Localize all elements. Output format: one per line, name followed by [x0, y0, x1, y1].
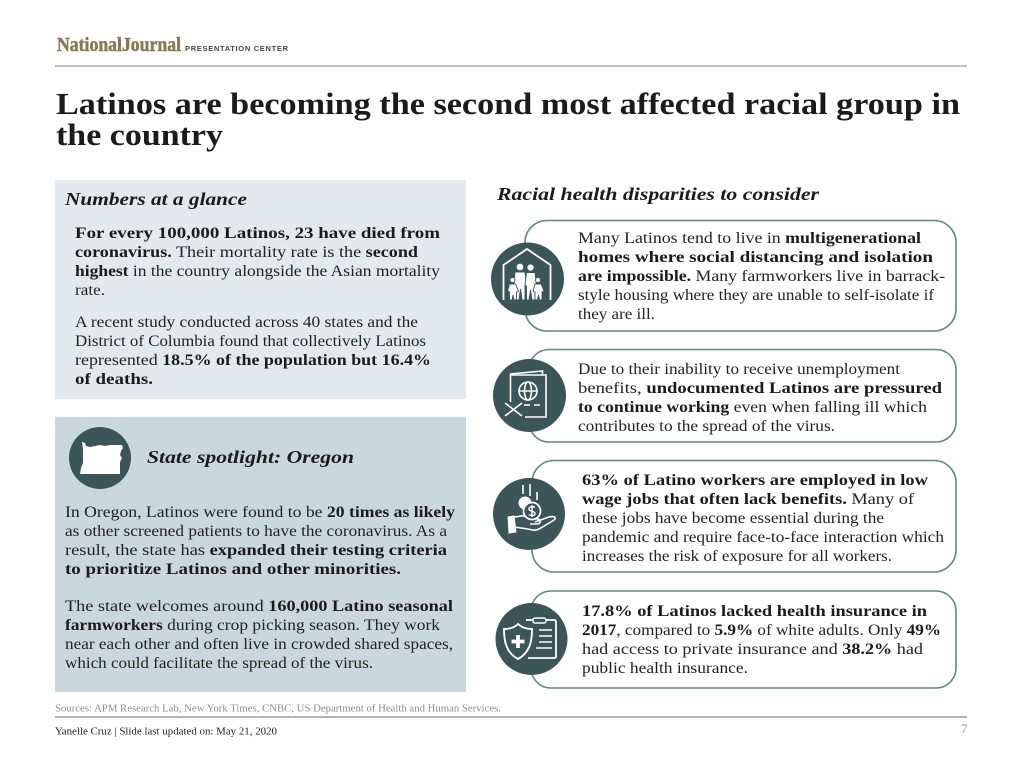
card: low wage jobs — [493, 460, 956, 572]
text block: 40 state study — [75, 314, 431, 388]
text: low wage — [582, 472, 944, 565]
text: housing: style housing where they are unable to self-isolate if — [578, 287, 935, 304]
text block: mortality rate: coronavirus. Their mortality rate is the second — [75, 244, 418, 261]
sources: Sources: APM Research Lab, New York Times, CNBC, US Department of Health and Human Services. — [55, 704, 501, 714]
text: low wage: wage jobs that often lack benefits. Many of — [582, 491, 915, 508]
icon: family in house — [491, 242, 564, 316]
text block: seasonal farmworkers — [65, 598, 454, 672]
panel: numbers at a glance — [55, 180, 466, 399]
text: low wage: increases the risk of exposure for all workers. — [582, 548, 892, 565]
text block: 40 state study: A recent study conducted across 40 states and the — [75, 314, 418, 331]
text: unemployment — [578, 361, 942, 435]
text: insurance: public health insurance. — [582, 660, 748, 677]
text block: testing criteria: result, the state has expanded their testing criteria — [65, 542, 447, 559]
text block: seasonal farmworkers: which could facilitate the spread of the virus. — [65, 655, 373, 672]
text block: testing criteria: to prioritize Latinos and other minorities. — [65, 561, 401, 578]
text block: 40 state study: District of Columbia found that collectively Latinos — [75, 333, 426, 350]
text: housing: they are ill. — [578, 306, 655, 323]
text block: testing criteria: In Oregon, Latinos were found to be 20 times as likely — [65, 504, 455, 521]
logo: National Journal Presentation Center: NationalJournal — [57, 34, 181, 56]
text: housing: homes where social distancing and isolation — [578, 249, 933, 266]
text block: testing criteria — [65, 504, 455, 578]
icon: passport — [493, 359, 566, 432]
title: Latinos are becoming the second most affected racial group in — [56, 87, 960, 121]
icon: Oregon map — [69, 427, 131, 489]
heading: racial health disparities: Racial health disparities to consider — [496, 184, 820, 204]
text: insurance: had access to private insurance and 38.2% had — [582, 641, 923, 658]
logo: National Journal Presentation Center: PRESENTATION CENTER — [185, 44, 289, 53]
footer credit: Yanelle Cruz | Slide last updated on: May 21, 2020 — [55, 726, 277, 738]
text: unemployment: Due to their inability to receive unemployment — [578, 361, 901, 378]
card: undocumented Latinos — [493, 350, 956, 442]
text block: mortality rate — [75, 225, 441, 299]
title — [56, 87, 960, 152]
text: housing: are impossible. Many farmworkers live in barrack- — [578, 268, 945, 285]
title: the country — [56, 118, 223, 152]
panel: state spotlight Oregon — [55, 417, 466, 692]
icon: shield and clipboard — [496, 603, 568, 675]
heading: numbers at a glance: Numbers at a glance — [64, 189, 247, 209]
page number: 7 — [961, 721, 968, 736]
text block: seasonal farmworkers: The state welcomes around 160,000 Latino seasonal — [65, 598, 454, 615]
text: unemployment: benefits, undocumented Latinos are pressured — [578, 380, 942, 397]
logo: National Journal Presentation Center — [57, 34, 289, 56]
text block: mortality rate: rate. — [75, 282, 105, 299]
icon: coin over hand — [493, 478, 565, 550]
text: unemployment: contributes to the spread of the virus. — [578, 418, 835, 435]
text: insurance: 2017, compared to 5.9% of white adults. Only 49% — [582, 622, 941, 639]
text: unemployment: to continue working even when falling ill which — [578, 399, 927, 416]
text block: seasonal farmworkers: near each other and often live in crowded shared spaces, — [65, 636, 453, 653]
text: insurance — [582, 603, 941, 677]
text: low wage: 63% of Latino workers are employed in low — [582, 472, 929, 489]
text block: mortality rate: For every 100,000 Latinos, 23 have died from — [75, 225, 441, 242]
text: insurance: 17.8% of Latinos lacked health insurance in — [582, 603, 927, 620]
text: low wage: these jobs have become essential during the — [582, 510, 884, 527]
text: housing: Many Latinos tend to live in multigenerational — [578, 230, 922, 247]
text block: seasonal farmworkers: farmworkers during crop picking season. They work — [65, 617, 440, 634]
text block: testing criteria: as other screened patients to have the coronavirus. As a — [65, 523, 447, 540]
card: health insurance — [496, 591, 956, 688]
text: low wage: pandemic and require face-to-face interaction which — [582, 529, 944, 546]
text block: mortality rate: highest in the country alongside the Asian mortality — [75, 263, 440, 280]
card: multigenerational homes — [491, 220, 956, 331]
heading: state spotlight: State spotlight: Oregon — [147, 447, 354, 467]
text: housing — [578, 230, 945, 323]
text block: 40 state study: of deaths. — [75, 371, 153, 388]
text block: 40 state study: represented 18.5% of the population but 16.4% — [75, 352, 431, 369]
